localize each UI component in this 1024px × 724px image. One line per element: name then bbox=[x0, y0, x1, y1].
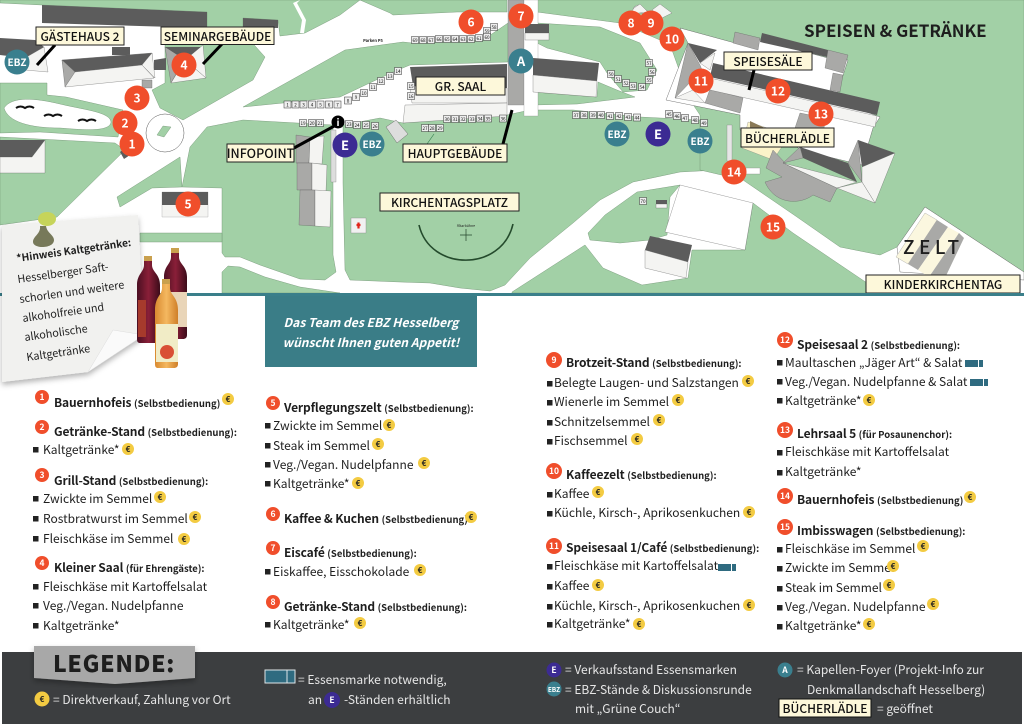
legend: token sale: = Verkaufsstand Essensmarken bbox=[565, 661, 737, 678]
stall numbers: 24 bbox=[354, 123, 360, 129]
stall 3: € bbox=[158, 492, 163, 503]
stall numbers: 66 bbox=[436, 37, 442, 43]
stall 8: € bbox=[358, 618, 363, 629]
stage arc bbox=[419, 224, 513, 260]
stall 4 bbox=[33, 556, 208, 634]
stall numbers: 5 bbox=[319, 102, 322, 108]
stall 11: € bbox=[747, 600, 752, 611]
stall 15: € bbox=[891, 561, 896, 572]
stall numbers: 45 bbox=[666, 112, 672, 118]
banner: greeting bbox=[265, 296, 477, 367]
stall 10: 10 bbox=[549, 465, 559, 477]
stall 5: Verpflegungszelt (Selbstbedienung): bbox=[283, 399, 474, 416]
stall 5: € bbox=[422, 458, 427, 469]
stall 9: 9 bbox=[551, 354, 557, 366]
label: Seminargebäude: SEMINARGEBÄUDE bbox=[164, 28, 271, 45]
note text: schorlen und weitere bbox=[18, 276, 125, 307]
legend: meal token: -Ständen erhältlich bbox=[344, 691, 451, 708]
legend: chapel foyer: A bbox=[781, 664, 788, 676]
label: Kinderkirchentag: KINDERKIRCHENTAG bbox=[884, 276, 1002, 293]
note: Kaltgetränke bbox=[2, 212, 144, 382]
map markers: numbered stalls bbox=[112, 4, 834, 240]
stall 3: Zwickte im Semmel bbox=[43, 490, 152, 507]
stall 12: Veg./Vegan. Nudelpfanne & Salat bbox=[785, 373, 968, 390]
map markers: numbered stalls: 11 bbox=[694, 72, 708, 90]
dining hall complex bbox=[666, 28, 895, 203]
stall 7: Eiscafé (Selbstbedienung): bbox=[284, 544, 417, 561]
stall numbers: 47 bbox=[682, 116, 688, 122]
note text: *Hinweis Kaltgetränke: bbox=[15, 234, 132, 265]
label: Bücherlädle: BÜCHERLÄDLE bbox=[745, 130, 830, 147]
stall 15 bbox=[777, 519, 965, 634]
legend: EBZ: mit „Grüne Couch“ bbox=[575, 700, 680, 717]
stall 8: Getränke-Stand (Selbstbedienung): bbox=[284, 598, 467, 615]
stall numbers: 50 bbox=[608, 72, 614, 78]
stall numbers: 29 bbox=[437, 126, 443, 132]
buildings: centre bbox=[386, 0, 672, 144]
legend panel bbox=[2, 645, 1022, 724]
legend: EBZ: EBZ bbox=[548, 684, 560, 694]
stall 13 bbox=[777, 422, 952, 480]
stall numbers: 7 bbox=[336, 102, 339, 108]
stall numbers: 23 bbox=[346, 122, 352, 128]
note text bbox=[15, 234, 132, 365]
stall numbers: 35 bbox=[485, 116, 491, 122]
stall numbers: 38 bbox=[581, 113, 587, 119]
stall 15: € bbox=[931, 599, 936, 610]
map markers: chapel foyer, EBZ, tokens, info: EBZ bbox=[607, 126, 627, 141]
stall 12: Kaltgetränke* bbox=[785, 392, 862, 409]
stall 11: € bbox=[596, 580, 601, 591]
map markers: chapel foyer, EBZ, tokens, info: EBZ bbox=[690, 133, 710, 148]
stall numbers: 10 bbox=[361, 91, 367, 97]
legend: bookshop open: BÜCHERLÄDLE bbox=[783, 700, 867, 717]
heading: Speisen und Getränke: SPEISEN & GETRÄNKE bbox=[804, 17, 987, 42]
stall numbers: 48 bbox=[692, 118, 698, 124]
stall numbers: 39 bbox=[590, 113, 596, 119]
stall numbers: 62 bbox=[468, 37, 474, 43]
stall numbers: 12 bbox=[378, 79, 384, 85]
stall 12: Maultaschen „Jäger Art“ & Salat bbox=[785, 354, 963, 371]
stall 9: Schnitzelsemmel bbox=[554, 413, 650, 430]
column 1 bbox=[33, 390, 237, 634]
stall numbers: 8 bbox=[347, 98, 350, 104]
stall 11 bbox=[546, 538, 759, 632]
stall 9: Brotzeit-Stand (Selbstbedienung): bbox=[566, 354, 742, 371]
stall 5: Veg./Vegan. Nudelpfanne bbox=[273, 456, 414, 473]
stall numbers: 32 bbox=[460, 117, 466, 123]
stall numbers: 40 bbox=[598, 113, 604, 119]
stall 11: Kaltgetränke* bbox=[554, 615, 631, 632]
stall 15: Veg./Vegan. Nudelpfanne bbox=[785, 598, 926, 615]
stall 9: Belegte Laugen- und Salzstangen bbox=[554, 374, 739, 391]
stall 11: Fleischkäse mit Kartoffelsalat bbox=[554, 557, 719, 574]
label: Hauptgebäude: HAUPTGEBÄUDE bbox=[408, 145, 502, 162]
stall numbers: 36 bbox=[500, 116, 506, 122]
stall numbers: 19 bbox=[300, 121, 306, 127]
legend: meal token: = Essensmarke notwendig, bbox=[298, 671, 447, 688]
stall numbers: 68 bbox=[420, 38, 426, 44]
stall 1: 1 bbox=[39, 391, 45, 403]
stall 10 bbox=[546, 463, 755, 521]
stall numbers: 69 bbox=[412, 38, 418, 44]
stall numbers: 54 bbox=[639, 85, 645, 91]
first aid station bbox=[351, 218, 366, 233]
stall 8: Kaltgetränke* bbox=[273, 616, 350, 633]
legend: EBZ bbox=[546, 681, 752, 717]
stall 15: Fleischkäse im Semmel bbox=[785, 540, 915, 557]
stall 11: Speisesaal 1/Café (Selbstbedienung): bbox=[566, 539, 759, 556]
legend heading: LEGENDE: bbox=[53, 645, 175, 679]
note text: Hesselberger Saft- bbox=[16, 258, 110, 287]
legend: chapel foyer: Denkmallandschaft Hesselberg) bbox=[807, 681, 985, 698]
stall numbers: 65 bbox=[444, 37, 450, 43]
stall numbers: 14 bbox=[395, 69, 401, 75]
stall numbers: 37 bbox=[573, 113, 579, 119]
label: Gr. Saal bbox=[416, 77, 505, 95]
stall 4: 4 bbox=[39, 557, 45, 569]
stall 6: Kaffee & Kuchen (Selbstbedienung) bbox=[284, 510, 468, 527]
banner: greeting: wünscht Ihnen guten Appetit! bbox=[283, 334, 461, 351]
stall numbers bbox=[284, 24, 708, 205]
stall numbers: 61 bbox=[476, 36, 482, 42]
stall numbers: 59 bbox=[484, 29, 490, 35]
stall 8 bbox=[265, 595, 467, 633]
stall numbers: 67 bbox=[428, 38, 434, 44]
stall numbers: 2 bbox=[294, 102, 297, 108]
stall numbers: 25 bbox=[363, 123, 369, 129]
map markers: numbered stalls: 8 bbox=[627, 14, 635, 32]
stall 3: € bbox=[182, 534, 187, 545]
map markers: numbered stalls: 14 bbox=[727, 164, 741, 180]
label: Gr. Saal: GR. SAAL bbox=[435, 78, 487, 95]
buildings: south bbox=[645, 185, 753, 278]
stall 15: € bbox=[887, 580, 892, 591]
stall 12: 12 bbox=[780, 334, 790, 346]
legend: direct sale: € bbox=[40, 694, 45, 705]
stall 7: 7 bbox=[270, 542, 276, 554]
stall 7: € bbox=[418, 565, 423, 576]
legend: bookshop open bbox=[779, 699, 933, 717]
stall 4: Fleischkäse mit Kartoffelsalat bbox=[43, 578, 208, 595]
column 4 bbox=[777, 332, 988, 634]
stall 10: € bbox=[747, 507, 752, 518]
stall numbers: 57 bbox=[646, 61, 652, 67]
stall 3: 3 bbox=[39, 469, 45, 481]
stall 5: Steak im Semmel bbox=[273, 437, 370, 454]
stall 8: 8 bbox=[270, 596, 276, 608]
stall 15: € bbox=[867, 619, 872, 630]
stall 12: Speisesaal 2 (Selbstbedienung): bbox=[797, 336, 960, 353]
map markers: numbered stalls: 5 bbox=[184, 196, 192, 212]
stall 4: Veg./Vegan. Nudelpfanne bbox=[43, 597, 184, 614]
label: Zelt: ZELT bbox=[903, 233, 964, 260]
map markers: numbered stalls: 2 bbox=[121, 114, 129, 132]
map markers: numbered stalls: 12 bbox=[771, 82, 785, 100]
stall numbers: 15 bbox=[408, 84, 414, 90]
label: Speisesäle: SPEISESÄLE bbox=[733, 53, 803, 70]
map markers: numbered stalls: 9 bbox=[647, 14, 655, 32]
stall 3 bbox=[33, 468, 208, 547]
stall 3: Grill-Stand (Selbstbedienung): bbox=[54, 472, 208, 489]
stall numbers: 64 bbox=[452, 37, 458, 43]
parking text: Parken P5 bbox=[363, 38, 384, 44]
legend: chapel foyer bbox=[778, 661, 985, 698]
stall 1: Bauernhofeis (Selbstbedienung) bbox=[54, 394, 220, 411]
stall numbers: 9 bbox=[355, 95, 358, 101]
stall 10: Kaffeezelt (Selbstbedienung): bbox=[566, 466, 717, 483]
stall 10: Küchle, Kirsch-, Aprikosenkuchen bbox=[554, 504, 740, 521]
map markers: chapel foyer, EBZ, tokens, info bbox=[4, 48, 712, 158]
legend: token sale: E bbox=[551, 664, 557, 676]
stall 13: Fleischkäse mit Kartoffelsalat bbox=[785, 443, 950, 460]
stall numbers: 20 bbox=[309, 121, 315, 127]
stall numbers: 16 bbox=[408, 94, 414, 100]
banner: greeting: Das Team des EBZ Hesselberg bbox=[284, 314, 460, 331]
stall numbers: 49 bbox=[701, 121, 707, 127]
stall numbers: 44 bbox=[634, 116, 640, 122]
stall numbers: 56 bbox=[649, 70, 655, 76]
stall numbers: 70 bbox=[640, 199, 646, 205]
legend: direct sale: = Direktverkauf, Zahlung vor Ort bbox=[53, 691, 231, 708]
column 2 bbox=[265, 396, 477, 633]
map markers: chapel foyer, EBZ, tokens, info: A bbox=[516, 51, 526, 70]
stall 5: € bbox=[356, 478, 361, 489]
map markers: numbered stalls: 1 bbox=[128, 136, 136, 152]
note text: alkoholfreie und bbox=[21, 299, 105, 326]
stall 14: 14 bbox=[780, 490, 790, 502]
stall numbers: 41 bbox=[607, 114, 613, 120]
icon: pin bbox=[33, 212, 56, 247]
stall 9: € bbox=[635, 434, 640, 445]
stall 12 bbox=[777, 332, 988, 409]
legend: chapel foyer: = Kapellen-Foyer (Projekt-Info zur bbox=[797, 661, 984, 678]
stall 15: € bbox=[921, 541, 926, 552]
stall 5: € bbox=[376, 439, 381, 450]
stall 1: € bbox=[226, 394, 231, 405]
map markers: chapel foyer, EBZ, tokens, info: E bbox=[654, 124, 662, 143]
bottles bbox=[137, 248, 187, 368]
label: Infopoint: INFOPOINT bbox=[227, 143, 295, 162]
stall numbers: 58 bbox=[491, 25, 497, 31]
stall numbers: 26 bbox=[372, 124, 378, 130]
stall numbers: 53 bbox=[630, 84, 636, 90]
column 3 bbox=[546, 352, 759, 632]
stall 13: Lehrsaal 5 (für Posaunenchor): bbox=[797, 425, 952, 442]
stall numbers: 1 bbox=[286, 102, 289, 108]
stall 9: Wienerle im Semmel bbox=[554, 393, 669, 410]
label: Kirchentagsplatz: KIRCHENTAGSPLATZ bbox=[391, 194, 508, 211]
stall numbers: 33 bbox=[469, 117, 475, 123]
map markers: chapel foyer, EBZ, tokens, info: EBZ bbox=[7, 54, 27, 69]
buildings: west bbox=[0, 5, 336, 227]
stall 3: Rostbratwurst im Semmel bbox=[43, 510, 188, 527]
stall 15: Kaltgetränke* bbox=[785, 617, 862, 634]
stall numbers: 42 bbox=[616, 114, 622, 120]
stall 10: Kaffee bbox=[554, 485, 590, 502]
note text: alkoholische bbox=[23, 320, 89, 345]
stall numbers: 6 bbox=[328, 102, 331, 108]
stall 2 bbox=[33, 420, 237, 458]
stall numbers: 46 bbox=[674, 114, 680, 120]
stall 7: Eiskaffee, Eisschokolade bbox=[273, 563, 410, 580]
stall numbers: 4 bbox=[311, 102, 314, 108]
stall 2: 2 bbox=[39, 421, 45, 433]
map markers: numbered stalls: 10 bbox=[665, 30, 679, 48]
stall 3: € bbox=[193, 512, 198, 523]
stall 11: € bbox=[637, 619, 642, 630]
stall numbers: 13 bbox=[387, 74, 393, 80]
stall 9: € bbox=[676, 395, 681, 406]
stall 5: Kaltgetränke* bbox=[273, 475, 350, 492]
label: Gästehaus 2: GÄSTEHAUS 2 bbox=[40, 28, 120, 45]
pointer lines bbox=[37, 44, 754, 148]
stall 11: 11 bbox=[549, 540, 559, 552]
stall 11: Küchle, Kirsch-, Aprikosenkuchen bbox=[554, 597, 740, 614]
stall numbers: 51 bbox=[615, 77, 621, 83]
stall numbers: 21 bbox=[317, 121, 323, 127]
stall 13: 13 bbox=[780, 424, 790, 436]
stall numbers: 11 bbox=[370, 85, 376, 91]
note text: Kaltgetränke bbox=[25, 340, 91, 365]
stall 1 bbox=[35, 390, 234, 411]
stage arc: Altarbühne bbox=[457, 224, 475, 229]
roundabout bbox=[146, 114, 184, 152]
tent bbox=[896, 207, 1024, 280]
stall 10: € bbox=[596, 487, 601, 498]
stall numbers: 3 bbox=[302, 102, 305, 108]
stall 5: Zwickte im Semmel bbox=[273, 417, 382, 434]
map markers: numbered stalls: 6 bbox=[467, 14, 475, 30]
teal map border bbox=[0, 293, 1024, 296]
legend: EBZ: = EBZ-Stände & Diskussionsrunde bbox=[565, 681, 752, 698]
stall 3: Fleischkäse im Semmel bbox=[43, 530, 173, 547]
stall numbers: 28 bbox=[429, 126, 435, 132]
legend: meal token: an bbox=[308, 691, 322, 708]
stall 6: 6 bbox=[270, 508, 276, 520]
map markers: chapel foyer, EBZ, tokens, info: E bbox=[341, 135, 349, 154]
stall 9 bbox=[546, 352, 754, 449]
map markers: chapel foyer, EBZ, tokens, info: EBZ bbox=[362, 136, 382, 151]
stall 15: Steak im Semmel bbox=[785, 579, 882, 596]
green areas bbox=[0, 0, 1024, 293]
stall 9: € bbox=[657, 415, 662, 426]
stall numbers: 43 bbox=[625, 115, 631, 121]
stall numbers: 34 bbox=[477, 116, 483, 122]
map markers: numbered stalls: 13 bbox=[814, 106, 828, 122]
stall 15: 15 bbox=[780, 521, 790, 533]
legend: meal token: E bbox=[329, 694, 335, 706]
stall 15: Zwickte im Semmel bbox=[785, 559, 894, 576]
note fold bbox=[88, 330, 144, 372]
stall 9: € bbox=[746, 376, 751, 387]
stall 14: Bauernhofeis (Selbstbedienung) bbox=[797, 491, 963, 508]
stall 4: Kaltgetränke* bbox=[43, 617, 120, 634]
stall 14: € bbox=[968, 492, 973, 503]
site map bbox=[0, 0, 1024, 296]
stall 5: € bbox=[387, 420, 392, 431]
legend heading bbox=[34, 645, 195, 684]
map markers: numbered stalls: 3 bbox=[133, 90, 141, 106]
stall 5 bbox=[265, 396, 474, 492]
stall 2: Getränke-Stand (Selbstbedienung): bbox=[54, 423, 237, 440]
map markers: numbered stalls: 15 bbox=[766, 218, 780, 236]
map markers: chapel foyer, EBZ, tokens, info: i bbox=[336, 114, 340, 129]
stall numbers: 63 bbox=[460, 37, 466, 43]
stall numbers: 52 bbox=[623, 81, 629, 87]
stall 12: € bbox=[867, 395, 872, 406]
stall 9: Fischsemmel bbox=[554, 432, 628, 449]
stall numbers: 27 bbox=[422, 126, 428, 132]
stall numbers: 55 bbox=[646, 78, 652, 84]
stall 2: Kaltgetränke* bbox=[43, 441, 120, 458]
stall numbers: 31 bbox=[452, 117, 458, 123]
legend: meal token bbox=[265, 670, 451, 708]
legend: bookshop open: = geöffnet bbox=[877, 700, 933, 717]
roundabout island bbox=[157, 126, 171, 137]
stall 4: Kleiner Saal (für Ehrengäste): bbox=[54, 559, 204, 576]
stall 6: € bbox=[469, 512, 474, 523]
stall 2: € bbox=[126, 444, 131, 455]
stall 7 bbox=[265, 541, 426, 580]
map markers: numbered stalls: 4 bbox=[180, 56, 188, 74]
map markers: numbered stalls: 7 bbox=[517, 8, 525, 24]
stall numbers: 60 bbox=[484, 35, 490, 41]
stall 15: Imbisswagen (Selbstbedienung): bbox=[797, 522, 965, 539]
stall 13: Kaltgetränke* bbox=[785, 463, 862, 480]
stall 11: Kaffee bbox=[554, 577, 590, 594]
pond bbox=[4, 99, 111, 130]
stall numbers: 30 bbox=[444, 117, 450, 123]
stall 5: 5 bbox=[270, 397, 276, 409]
